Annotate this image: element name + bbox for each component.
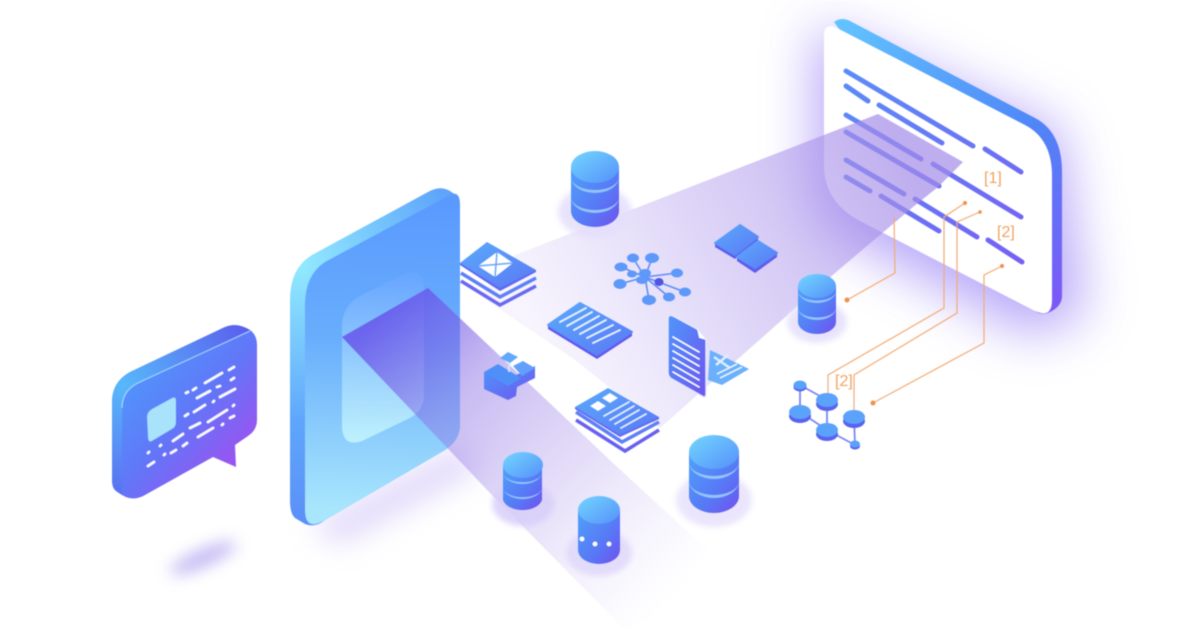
image thumbnail (147, 397, 176, 442)
floor shadow under chat bubble (167, 536, 239, 580)
database cylinder top (558, 151, 632, 238)
database cylinder large (676, 435, 752, 527)
bubble body (112, 325, 257, 498)
icon: stacked image sheets (460, 242, 536, 305)
panel face (824, 26, 1052, 313)
icon: node graph (789, 380, 865, 450)
icon: stacked report sheets (575, 388, 659, 451)
icon: small image sheet (708, 350, 749, 385)
panel: phone (290, 188, 460, 525)
panel: result document (824, 19, 1062, 314)
icon: network hub (614, 253, 691, 305)
database cylinder lower left (492, 452, 554, 526)
server cylinder with dots (566, 496, 632, 576)
citation label 2 by graph: [2] (835, 373, 853, 390)
glow behind result panel (815, 25, 1085, 335)
panel edge (834, 19, 1062, 314)
message dashes (148, 367, 235, 466)
bubble highlight (122, 331, 250, 408)
floor shadow under phone panel (310, 445, 480, 545)
database cylinder right (787, 274, 847, 343)
light beam from phone (342, 288, 740, 630)
connector end dots (844, 201, 1004, 406)
phone face (305, 194, 460, 524)
icon: two blocks (715, 225, 777, 273)
phone recess (342, 273, 424, 443)
bubble edge (112, 325, 250, 495)
text lines (846, 71, 1022, 262)
citation label 2 on document: [2] (997, 224, 1015, 241)
icon: flat document (548, 303, 632, 359)
light beam to result panel (480, 114, 963, 428)
icon: puzzle cube (484, 352, 535, 400)
chat bubble (112, 325, 257, 498)
citation label 1: [1] (984, 170, 1002, 187)
citation connector lines (828, 203, 1002, 410)
phone edge (290, 188, 460, 525)
icon: standing document (668, 315, 706, 397)
